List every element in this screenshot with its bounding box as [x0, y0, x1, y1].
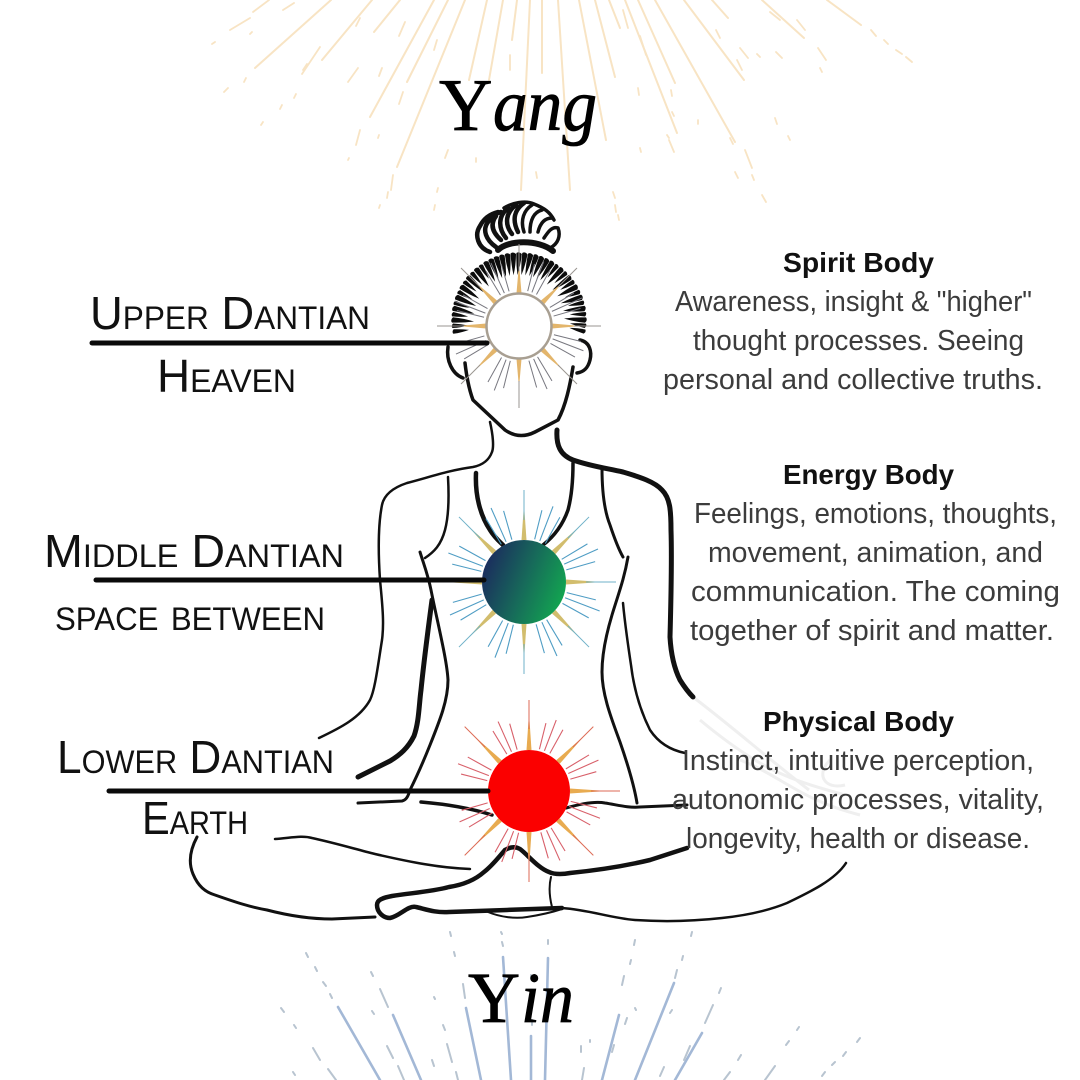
title: Yin — [468, 958, 574, 1038]
text block: energy body: Feelings, emotions, thoughts, — [694, 498, 1057, 530]
lower dantian sun — [438, 700, 620, 882]
yin rays — [281, 932, 860, 1080]
text block: physical body: Instinct, intuitive perception, — [682, 745, 1034, 777]
middle dantian sun — [432, 490, 616, 674]
upper dantian sun — [437, 244, 601, 408]
label: earth: Earth — [142, 792, 248, 844]
text block: energy body: Energy Body — [783, 459, 954, 490]
text block: physical body — [672, 706, 1044, 855]
text block: physical body: autonomic processes, vitality, — [672, 784, 1044, 816]
pointer line: lower — [109, 788, 488, 794]
text block: energy body — [690, 459, 1060, 647]
text block: spirit body: Awareness, insight & "higher" — [675, 286, 1032, 318]
figure: seated meditating woman — [190, 202, 860, 921]
text block: spirit body — [663, 247, 1043, 396]
title: Yang: ang — [493, 65, 597, 147]
bun — [477, 202, 559, 252]
text block: spirit body: thought processes. Seeing — [693, 325, 1024, 357]
label: heaven: Heaven — [157, 350, 296, 402]
label: space between: space between — [55, 588, 325, 640]
middle circle — [482, 540, 566, 624]
label: upper dantian: Upper Dantian — [90, 287, 370, 339]
text block: energy body: communication. The coming — [691, 576, 1060, 608]
text block: spirit body: personal and collective truths. — [663, 364, 1043, 396]
text block: physical body: longevity, health or disease. — [686, 823, 1030, 855]
lower circle — [488, 750, 570, 832]
title: Yang — [439, 65, 597, 147]
yang rays — [212, 0, 912, 220]
hair strands — [451, 252, 587, 334]
text block: physical body: Physical Body — [763, 706, 954, 737]
pointer line: middle — [96, 578, 484, 582]
label: middle dantian: Middle Dantian — [44, 525, 344, 577]
title: Yang: Y — [439, 65, 492, 147]
pointer line: upper — [92, 340, 487, 346]
torso and arms — [319, 422, 693, 803]
upper rays — [437, 244, 601, 408]
middle rays — [432, 490, 616, 674]
title: Yin: Y — [468, 958, 520, 1038]
lower rays — [438, 700, 620, 882]
text block: energy body: movement, animation, and — [708, 537, 1043, 569]
text block: energy body: together of spirit and matter. — [690, 615, 1054, 647]
text block: spirit body: Spirit Body — [783, 247, 934, 278]
waist and legs — [190, 802, 846, 921]
ghost arm (faint) — [693, 697, 860, 815]
upper circle — [486, 294, 552, 358]
title: Yin: in — [521, 958, 574, 1038]
label: lower dantian: Lower Dantian — [57, 731, 334, 783]
face and ears — [448, 340, 591, 436]
